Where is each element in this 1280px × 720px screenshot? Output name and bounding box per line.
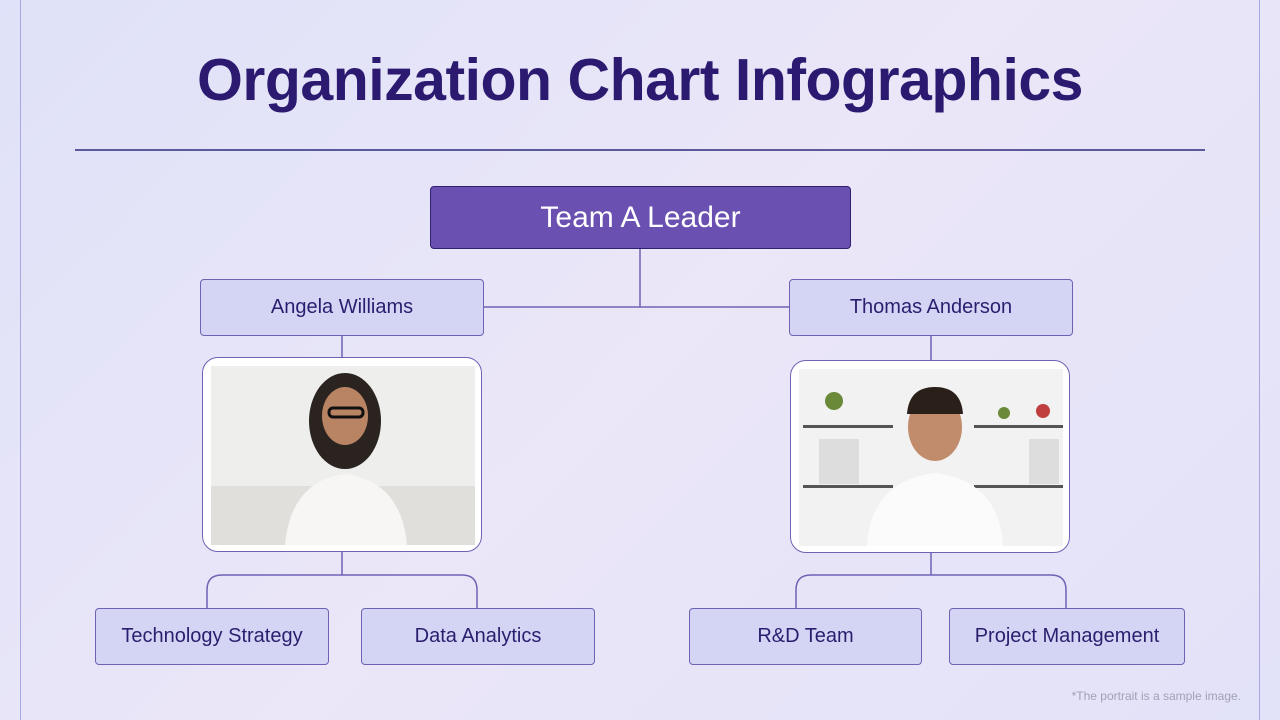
box: Angela Williams: Angela Williams — [271, 296, 413, 318]
box: R&D Team: R&D Team — [757, 625, 854, 647]
box: Project Management — [949, 608, 1185, 665]
box: R&D Team — [689, 608, 922, 665]
leader box: Team A Leader — [540, 200, 741, 234]
box: Technology Strategy — [95, 608, 329, 665]
photo: Angela — [202, 357, 482, 552]
box: Data Analytics — [361, 608, 595, 665]
box: Data Analytics: Data Analytics — [415, 625, 541, 647]
leader box — [430, 186, 851, 249]
box: Thomas Anderson: Thomas Anderson — [850, 296, 1012, 318]
footnote: *The portrait is a sample image. — [1072, 689, 1241, 703]
box: Thomas Anderson — [789, 279, 1073, 336]
box: Technology Strategy: Technology Strategy — [121, 625, 303, 647]
box: Angela Williams — [200, 279, 484, 336]
photo: Thomas — [790, 360, 1070, 553]
box: Project Management: Project Management — [975, 625, 1159, 647]
title: Organization Chart Infographics — [197, 47, 1083, 113]
